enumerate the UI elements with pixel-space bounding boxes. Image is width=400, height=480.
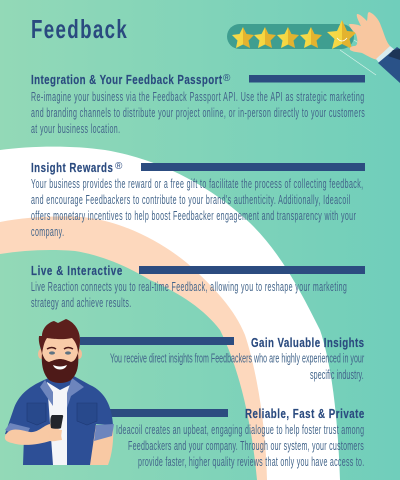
body text [110,353,365,383]
section: valuable insights [80,337,365,383]
body text: Re-imagine your business via the Feedback Passport API. Use the API as strategic marketing [31,91,364,105]
body text [31,178,363,240]
bar [141,163,365,171]
heading: Gain Valuable Insights [251,337,364,350]
body text: at your business location. [31,123,120,137]
heading: Reliable, Fast & Private [245,408,364,421]
body text: and branding channels to distribute your project online, or in-person directly to your customers [31,107,365,121]
brows [47,348,73,349]
collar right [67,378,84,408]
sleeve cuff [94,424,114,441]
body text: provide faster, higher quality reviews that only you have access to. [138,456,364,470]
face [42,337,78,372]
body text [31,281,347,311]
bar [249,75,365,82]
body text: Live Reaction connects you to real-time Feedback, allowing you to reshape your marketing [31,281,347,295]
registered mark: ® [115,161,123,172]
section: live and interactive [31,265,365,311]
body text [31,91,365,137]
t-shirt [47,382,74,465]
bar [108,409,228,417]
bar [80,337,234,345]
body text: company. [31,226,64,240]
body text: Your business provides the reward or a free gift to facilitate the process of collecting feedback, [31,178,363,192]
heading: Live & Interactive [31,265,122,278]
body text: and encourage Feedbackers to contribute to your brand's authenticity. Additionally, Ideacoil [31,194,350,208]
collar left [40,380,53,406]
mouth [53,365,67,370]
ears [38,349,44,359]
body text: You receive direct insights from Feedbackers who are highly experienced in your [110,353,365,366]
beard [42,353,78,383]
heading: Integration & Your Feedback Passport [31,74,222,87]
bar [139,266,365,274]
motion line [340,40,376,75]
section: integration [31,73,365,137]
section: insight rewards [31,161,365,240]
right forearm [88,425,113,465]
body text: specific industry. [310,369,364,383]
pockets [27,403,97,425]
heading: Insight Rewards [31,162,113,175]
white arc [0,147,340,480]
illustration: man with phone [5,319,114,465]
star rating graphic [227,12,400,83]
fingers [48,429,62,438]
sleeve [378,47,400,83]
title: Feedback [31,14,127,44]
peach arc [0,216,267,480]
section: reliable [108,408,364,470]
body text: offers monetary incentives to help boost Feedbacker engagement and transparency with your [31,210,356,224]
registered mark: ® [223,73,231,84]
hand [349,12,390,60]
forearm holding phone [5,424,62,445]
body text: Feedbackers and your company. Through our system, your customers [128,440,364,454]
body text: strategy and achieve results. [31,297,131,311]
hair [39,319,80,354]
eyes [49,351,55,355]
body text: Ideacoil creates an upbeat, engaging dialogue to help foster trust among [116,424,364,438]
cuff [376,46,395,64]
stars [232,20,357,49]
rating pill [227,24,354,49]
phone [50,415,63,429]
smile on big star [337,38,347,41]
body text [116,424,364,470]
shirt body [5,375,113,465]
